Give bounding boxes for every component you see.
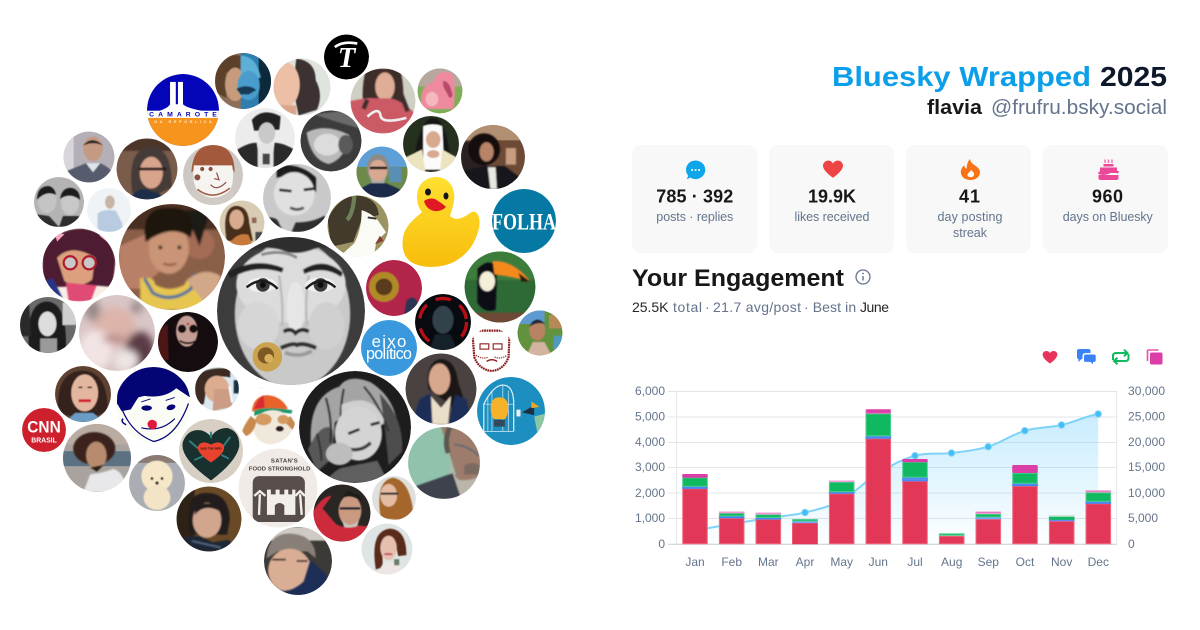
avatar: fluffy white puppy bbox=[129, 455, 185, 511]
stacked bars bbox=[683, 410, 1111, 544]
card: day posting streak bbox=[906, 145, 1031, 253]
avatar: child-like drawing of a face bbox=[183, 145, 243, 205]
avatar: smiling businesswoman bbox=[406, 354, 476, 424]
left axis labels bbox=[635, 384, 665, 551]
avatar: curly-haired woman in black jacket bbox=[461, 125, 525, 193]
avatar: New York Times T logo: T bbox=[338, 42, 357, 74]
avatar: Camarote da República logo bbox=[147, 74, 219, 146]
avatar: Camarote da República logo: DA REPÚBLICA bbox=[154, 119, 212, 124]
avatar: man with glasses by a lake bbox=[356, 146, 408, 198]
avatar: man with grey hair in navy hoodie bbox=[264, 527, 332, 595]
cumulative line bbox=[695, 414, 1098, 530]
avatar: CNN Brasil logo: BRASIL bbox=[31, 435, 57, 444]
right axis labels: 20,000 bbox=[1128, 435, 1165, 449]
avatar: Satan's Food Stronghold logo: FOOD STRONGHOLD bbox=[249, 467, 311, 473]
card: days on Bluesky bbox=[1043, 145, 1168, 253]
avatar: dog in propeller cap bbox=[242, 387, 296, 445]
avatar: tattooed woman with auburn curls bbox=[362, 524, 412, 574]
avatar: Eixo Político logo: eixo bbox=[372, 332, 406, 351]
engagement summary line: · bbox=[705, 299, 710, 315]
avatar: woman in home office bbox=[220, 200, 264, 246]
left axis labels: 2,000 bbox=[635, 486, 665, 500]
icon: info bbox=[856, 270, 870, 284]
avatar: embroidered black heart bbox=[179, 419, 243, 483]
bar: Jul bbox=[903, 460, 927, 544]
avatar: illustrated green profile bbox=[328, 196, 388, 256]
card: likes received: likes received bbox=[794, 210, 870, 224]
user name and handle: flavia bbox=[927, 97, 983, 119]
left axis labels: 1,000 bbox=[635, 511, 665, 525]
card: days on Bluesky: 960 bbox=[1092, 186, 1123, 206]
bar: Jun bbox=[866, 410, 891, 544]
icon: reposts arrows bbox=[1113, 350, 1128, 364]
avatar: Eixo Político logo: político bbox=[366, 345, 412, 363]
bar: Sep bbox=[976, 512, 1001, 544]
icon: likes heart bbox=[1043, 351, 1057, 364]
chart: monthly engagement stacked bars with cumulative line bbox=[635, 384, 1165, 569]
avatar: CNN Brasil logo: CNN bbox=[27, 418, 61, 437]
left axis labels: 4,000 bbox=[635, 435, 665, 449]
right axis labels: 5,000 bbox=[1128, 511, 1158, 525]
bar: May bbox=[829, 481, 854, 544]
card: day posting streak: streak bbox=[953, 226, 988, 240]
card: days on Bluesky: days on Bluesky bbox=[1063, 210, 1154, 224]
card: posts and replies bbox=[632, 145, 757, 253]
avatar: horror movie circular badge bbox=[415, 294, 471, 350]
engagement summary line: 25.5K bbox=[632, 299, 669, 315]
left axis labels: 5,000 bbox=[635, 410, 665, 424]
avatar: woman with curly hair and red lips bbox=[55, 366, 111, 422]
card: likes received: 19.9K bbox=[808, 186, 856, 206]
cumulative line points bbox=[802, 411, 1101, 516]
avatar: black and white woman with fringe bbox=[263, 164, 331, 232]
avatar: Folha logo: FOLHA bbox=[492, 208, 556, 234]
avatar: embroidered black heart: SAID THE BIRD bbox=[200, 447, 222, 451]
card: day posting streak: day posting bbox=[938, 210, 1003, 224]
avatar: curly-haired man in white shirt bbox=[63, 424, 131, 492]
month labels: Sep bbox=[978, 555, 999, 569]
bar: Dec bbox=[1086, 491, 1111, 544]
avatar: grey abstract hand photo bbox=[300, 110, 362, 172]
right axis labels bbox=[1128, 384, 1165, 551]
avatar: Medusa painting on crimson wall bbox=[366, 260, 422, 316]
right axis labels: 30,000 bbox=[1128, 384, 1165, 398]
avatar: Lina Cavalieri face bbox=[217, 234, 365, 388]
engagement summary line: total bbox=[673, 299, 702, 315]
month labels: Mar bbox=[758, 555, 779, 569]
avatar: navy drawing of boy licking lips bbox=[116, 367, 192, 443]
avatar: toucan on a branch bbox=[464, 252, 536, 324]
avatar: cartoon woman with red glasses bbox=[42, 228, 116, 302]
avatar: light bulb in a birdcage bbox=[477, 377, 545, 445]
icon: quotes squares bbox=[1148, 350, 1162, 364]
right axis labels: 25,000 bbox=[1128, 410, 1165, 424]
title: Bluesky Wrapped 2025: Bluesky Wrapped bbox=[832, 61, 1091, 92]
avatar: blurry close-up face bbox=[79, 295, 155, 374]
right axis labels: 10,000 bbox=[1128, 486, 1165, 500]
bar: Nov bbox=[1049, 516, 1074, 544]
avatar: black and white blonde woman bbox=[299, 371, 411, 483]
engagement summary line: · bbox=[804, 299, 809, 315]
bar: Mar bbox=[756, 513, 781, 544]
month labels: Oct bbox=[1016, 555, 1035, 569]
avatar: woman covering her mouth bbox=[195, 367, 239, 411]
user name and handle: @frufru.bsky.social bbox=[991, 97, 1167, 119]
bar: Jan bbox=[683, 474, 707, 544]
avatar: black and white man in jacket bbox=[235, 108, 295, 168]
avatar: close-up of bearded man by mint wall bbox=[408, 427, 480, 499]
month labels: Apr bbox=[796, 555, 814, 569]
engagement summary line: Best in bbox=[813, 299, 856, 315]
avatar: man in red shirt with headphones bbox=[314, 484, 370, 542]
month labels: Jan bbox=[685, 555, 705, 569]
title: Bluesky Wrapped 2025 bbox=[832, 61, 1167, 92]
card: day posting streak: 41 bbox=[959, 186, 980, 206]
avatar: man in grey sweater bbox=[64, 132, 114, 182]
month labels: May bbox=[830, 555, 853, 569]
avatar: woman in red t-shirt bbox=[350, 68, 416, 134]
avatar: older man in light shirt bbox=[87, 188, 131, 232]
card: likes received bbox=[769, 145, 894, 253]
left axis labels: 3,000 bbox=[635, 460, 665, 474]
avatar: red sketch of bearded man bbox=[469, 328, 513, 372]
left axis labels: 6,000 bbox=[635, 384, 665, 398]
avatar: CNN Brasil logo bbox=[22, 408, 66, 452]
avatar: Camarote da República logo: CAMAROTE bbox=[149, 111, 217, 118]
right axis labels: 15,000 bbox=[1128, 460, 1165, 474]
chart legend icons bbox=[1043, 349, 1162, 364]
avatar: Satan's Food Stronghold logo bbox=[238, 448, 318, 528]
avatar: yellow rubber duck bbox=[403, 177, 480, 267]
heading: Your Engagement: Your Engagement bbox=[632, 265, 844, 292]
month labels: Dec bbox=[1088, 555, 1109, 569]
cumulative area bbox=[695, 414, 1098, 544]
month labels: Feb bbox=[721, 555, 742, 569]
engagement summary line bbox=[632, 299, 889, 315]
title: Bluesky Wrapped 2025: 2025 bbox=[1100, 61, 1167, 92]
avatar: woman in skull makeup bbox=[158, 312, 218, 372]
left axis labels: 0 bbox=[658, 537, 665, 551]
card: posts and replies: 785 · 392 bbox=[656, 186, 733, 206]
bar: Apr bbox=[793, 520, 817, 544]
avatar: woman with red curly hair and glasses bbox=[372, 476, 416, 520]
avatar: man outdoors in striped shirt bbox=[518, 310, 562, 356]
avatar: New York Times T logo bbox=[324, 34, 369, 80]
month labels: Aug bbox=[941, 555, 962, 569]
avatar: woman with glasses indoors bbox=[116, 138, 178, 200]
month labels: Jul bbox=[907, 555, 923, 569]
engagement summary line: June bbox=[860, 299, 889, 315]
avatar: pink cartoon creature bbox=[418, 68, 462, 114]
avatar: boy in yellow tank top bbox=[119, 204, 225, 310]
avatar bubble cluster bbox=[20, 34, 562, 595]
panel: stat cards bbox=[632, 145, 1168, 253]
month labels bbox=[685, 555, 1109, 569]
avatar: half brown half blue face bbox=[215, 53, 271, 109]
icon: replies bubbles bbox=[1077, 349, 1096, 364]
avatar: Folha logo bbox=[492, 189, 556, 253]
avatar: woman with short dark hair and scarf bbox=[176, 486, 242, 552]
bar: Oct bbox=[1013, 466, 1037, 544]
avatar: two men black and white bbox=[34, 177, 84, 227]
month labels: Nov bbox=[1051, 555, 1072, 569]
card: posts and replies: posts · replies bbox=[656, 210, 733, 224]
bar: Aug bbox=[939, 534, 964, 544]
grid lines and axes bbox=[668, 391, 1117, 544]
avatar: woman with long dark hair bbox=[270, 58, 330, 117]
avatar: woman dressed as nun bbox=[403, 116, 459, 172]
right axis labels: 0 bbox=[1128, 537, 1135, 551]
avatar: black and white woman with dark hair bbox=[20, 297, 76, 353]
bar: Feb bbox=[719, 512, 744, 544]
avatar: Satan's Food Stronghold logo: SATAN'S bbox=[271, 459, 298, 465]
month labels: Jun bbox=[869, 555, 888, 569]
engagement summary line: 21.7 avg/post bbox=[713, 299, 801, 315]
avatar: Eixo Político logo bbox=[361, 320, 417, 376]
